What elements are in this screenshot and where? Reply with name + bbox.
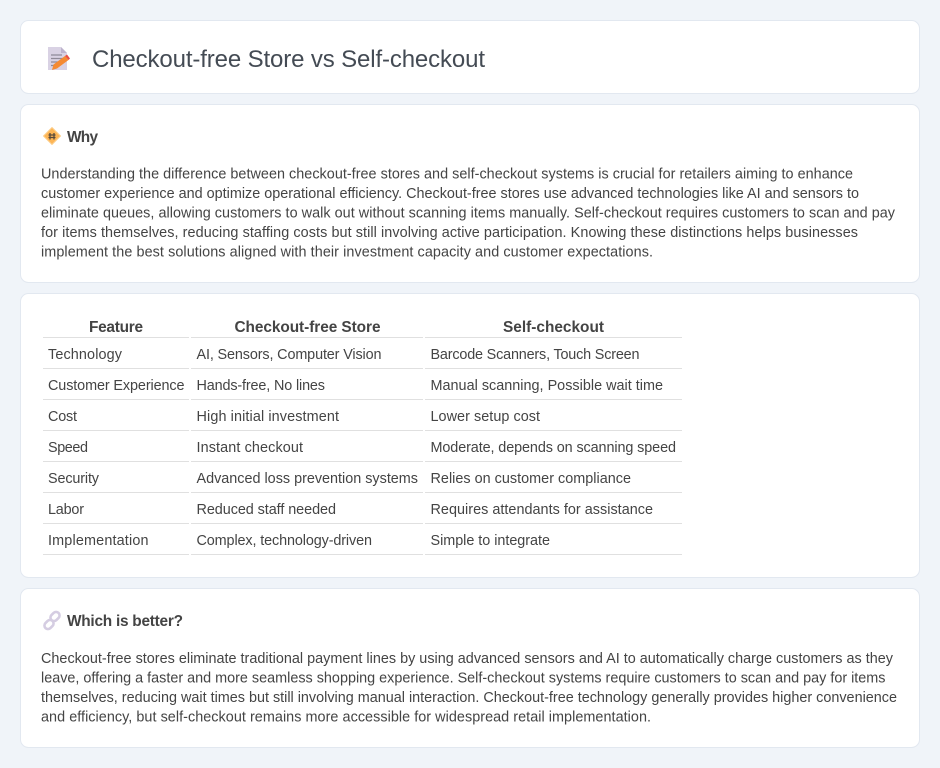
text block: why paragraph: eliminate queues, allowing customers to walk out without scanning items manually. Self-checkout requires customers to scan and pay xyxy=(41,206,896,222)
table header row xyxy=(89,319,604,336)
panel: which is better xyxy=(20,588,920,748)
row: labor xyxy=(48,502,653,518)
row: labor: Requires attendants for assistance xyxy=(430,502,653,518)
row: technology xyxy=(48,347,640,363)
text block: which paragraph xyxy=(41,651,897,726)
row: speed: Moderate, depends on scanning speed xyxy=(430,440,676,456)
text block: why paragraph: customer experience and optimize operational efficiency. Checkout-free stores use advanced technologies like AI and sensors to xyxy=(41,186,859,202)
row: technology: Technology xyxy=(48,347,123,363)
row: customer experience: Hands-free, No lines xyxy=(196,378,325,394)
row: security xyxy=(48,471,631,487)
text block: which paragraph: Checkout-free stores eliminate traditional payment lines by using advanced sensors and AI to automatically charge customers as they xyxy=(41,651,894,667)
table header row: Checkout-free Store xyxy=(234,319,381,336)
heading: why: Why xyxy=(67,129,98,146)
table header row: Self-checkout xyxy=(503,319,604,336)
text block: which paragraph: and efficiency, but self-checkout remains more accessible for widespread retail implementation. xyxy=(41,710,651,726)
panel: why xyxy=(20,104,920,282)
text block: which paragraph: themselves, reducing wait times but still involving manual interaction. Checkout-free technology generally provides higher convenience xyxy=(41,690,897,706)
text block: why paragraph: for items themselves, reducing staffing costs but still involving active participation. Knowing these distinctions helps businesses xyxy=(41,225,858,241)
icon: warning diamond xyxy=(44,128,60,144)
row: cost xyxy=(48,409,540,425)
icon: link xyxy=(43,610,61,631)
heading: which is better: Which is better? xyxy=(67,613,183,630)
row: cost: Cost xyxy=(48,409,77,425)
icon: memo with pencil xyxy=(48,47,70,70)
row: technology: AI, Sensors, Computer Vision xyxy=(196,347,382,363)
row: customer experience: Manual scanning, Possible wait time xyxy=(430,378,663,394)
row: speed: Instant checkout xyxy=(196,440,303,456)
panel: header xyxy=(20,20,920,94)
row: speed: Speed xyxy=(48,440,88,456)
row: labor: Labor xyxy=(48,502,84,518)
row: speed xyxy=(48,440,676,456)
row: cost: Lower setup cost xyxy=(430,409,540,425)
row: technology: Barcode Scanners, Touch Screen xyxy=(430,347,640,363)
row: cost: High initial investment xyxy=(196,409,339,425)
row: implementation: Simple to integrate xyxy=(430,533,550,549)
panel: comparison table xyxy=(20,294,920,578)
title: Checkout-free Store vs Self-checkout xyxy=(92,46,485,73)
row: implementation: Implementation xyxy=(48,533,148,549)
row: security: Relies on customer compliance xyxy=(430,471,631,487)
row: customer experience xyxy=(48,378,663,394)
row: security: Security xyxy=(48,471,100,487)
table header row: Feature xyxy=(89,319,143,336)
text block: which paragraph: leave, offering a faster and more seamless shopping experience. Self-checkout systems require customers to scan and pay for items xyxy=(41,670,886,686)
row: implementation: Complex, technology-driven xyxy=(196,533,372,549)
row: security: Advanced loss prevention systems xyxy=(196,471,418,487)
row: labor: Reduced staff needed xyxy=(196,502,336,518)
text block: why paragraph: Understanding the difference between checkout-free stores and self-checkout systems is crucial for retailers aiming to enhance xyxy=(41,166,853,182)
text block: why paragraph xyxy=(41,166,896,260)
text block: why paragraph: implement the best solutions aligned with their investment capacity and customer expectations. xyxy=(41,244,653,260)
row: implementation xyxy=(48,533,550,549)
row: customer experience: Customer Experience xyxy=(48,378,184,394)
